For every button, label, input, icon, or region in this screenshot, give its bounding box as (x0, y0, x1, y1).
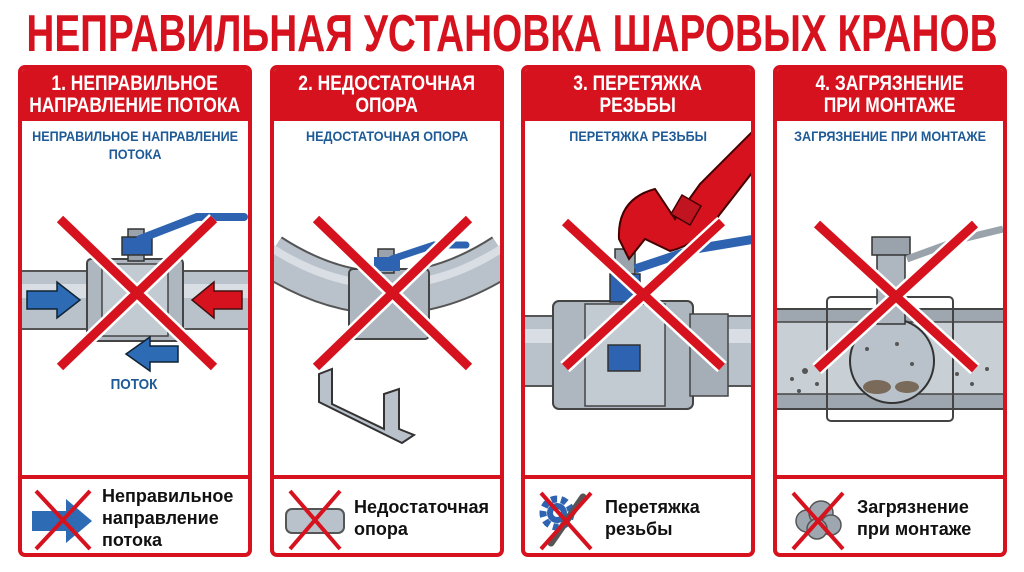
panel: contamination during installation (773, 65, 1007, 557)
bottom text (605, 497, 700, 539)
illustration: valve with arrows (22, 213, 248, 393)
panel header: 2. НЕДОСТАТОЧНАЯ (299, 72, 475, 95)
bottom icon: dirt cloud (792, 492, 844, 550)
bottom text: опора (354, 519, 408, 539)
panel header: 4. ЗАГРЯЗНЕНИЕ (816, 72, 964, 95)
panel: overtightened thread (521, 65, 755, 557)
subtitle: НЕДОСТАТОЧНАЯ ОПОРА (306, 128, 468, 144)
panel: wrong flow direction (18, 65, 252, 557)
panel header (30, 72, 240, 117)
bottom text: резьбы (605, 519, 673, 539)
illustration: sagging pipe and bracket (274, 216, 500, 444)
bottom text: Перетяжка (605, 497, 700, 517)
bottom icon: crossed pipe (285, 490, 345, 550)
panel header (298, 72, 475, 117)
bottom icon: gear and wrench (540, 492, 592, 550)
bottom text: потока (102, 530, 162, 550)
bottom icon: crossed arrow (32, 490, 92, 550)
bottom text (857, 497, 971, 539)
subtitle: ПЕРЕТЯЖКА РЕЗЬБЫ (569, 128, 707, 144)
bottom text: Загрязнение (857, 497, 969, 517)
title: НЕПРАВИЛЬНАЯ УСТАНОВКА ШАРОВЫХ КРАНОВ (26, 5, 998, 63)
subtitle: НЕПРАВИЛЬНОЕ НАПРАВЛЕНИЕ (32, 128, 238, 144)
subtitle: ПОТОКА (109, 146, 161, 162)
bottom text (354, 497, 489, 539)
bottom text (102, 486, 233, 550)
bottom text: направление (102, 508, 219, 528)
illustration: valve cross-section with debris (777, 220, 1003, 422)
subtitle: ЗАГРЯЗНЕНИЕ ПРИ МОНТАЖЕ (794, 128, 986, 144)
panel header: ПРИ МОНТАЖЕ (824, 94, 956, 117)
panel header (816, 72, 964, 117)
panel header: 3. ПЕРЕТЯЖКА (574, 72, 702, 95)
bottom text: при монтаже (857, 519, 971, 539)
panel header: ОПОРА (356, 94, 418, 117)
panel: insufficient support (270, 65, 504, 557)
panel header: 1. НЕПРАВИЛЬНОЕ (52, 72, 218, 95)
illustration: valve with wrench (525, 132, 751, 410)
panel header: РЕЗЬБЫ (600, 94, 676, 117)
bottom text: Неправильное (102, 486, 233, 506)
bottom text: Недостаточная (354, 497, 489, 517)
subtitle (32, 128, 238, 162)
panel header: НАПРАВЛЕНИЕ ПОТОКА (30, 94, 240, 117)
illustration: valve with arrows: ПОТОК (111, 376, 158, 393)
panel header (574, 72, 702, 117)
